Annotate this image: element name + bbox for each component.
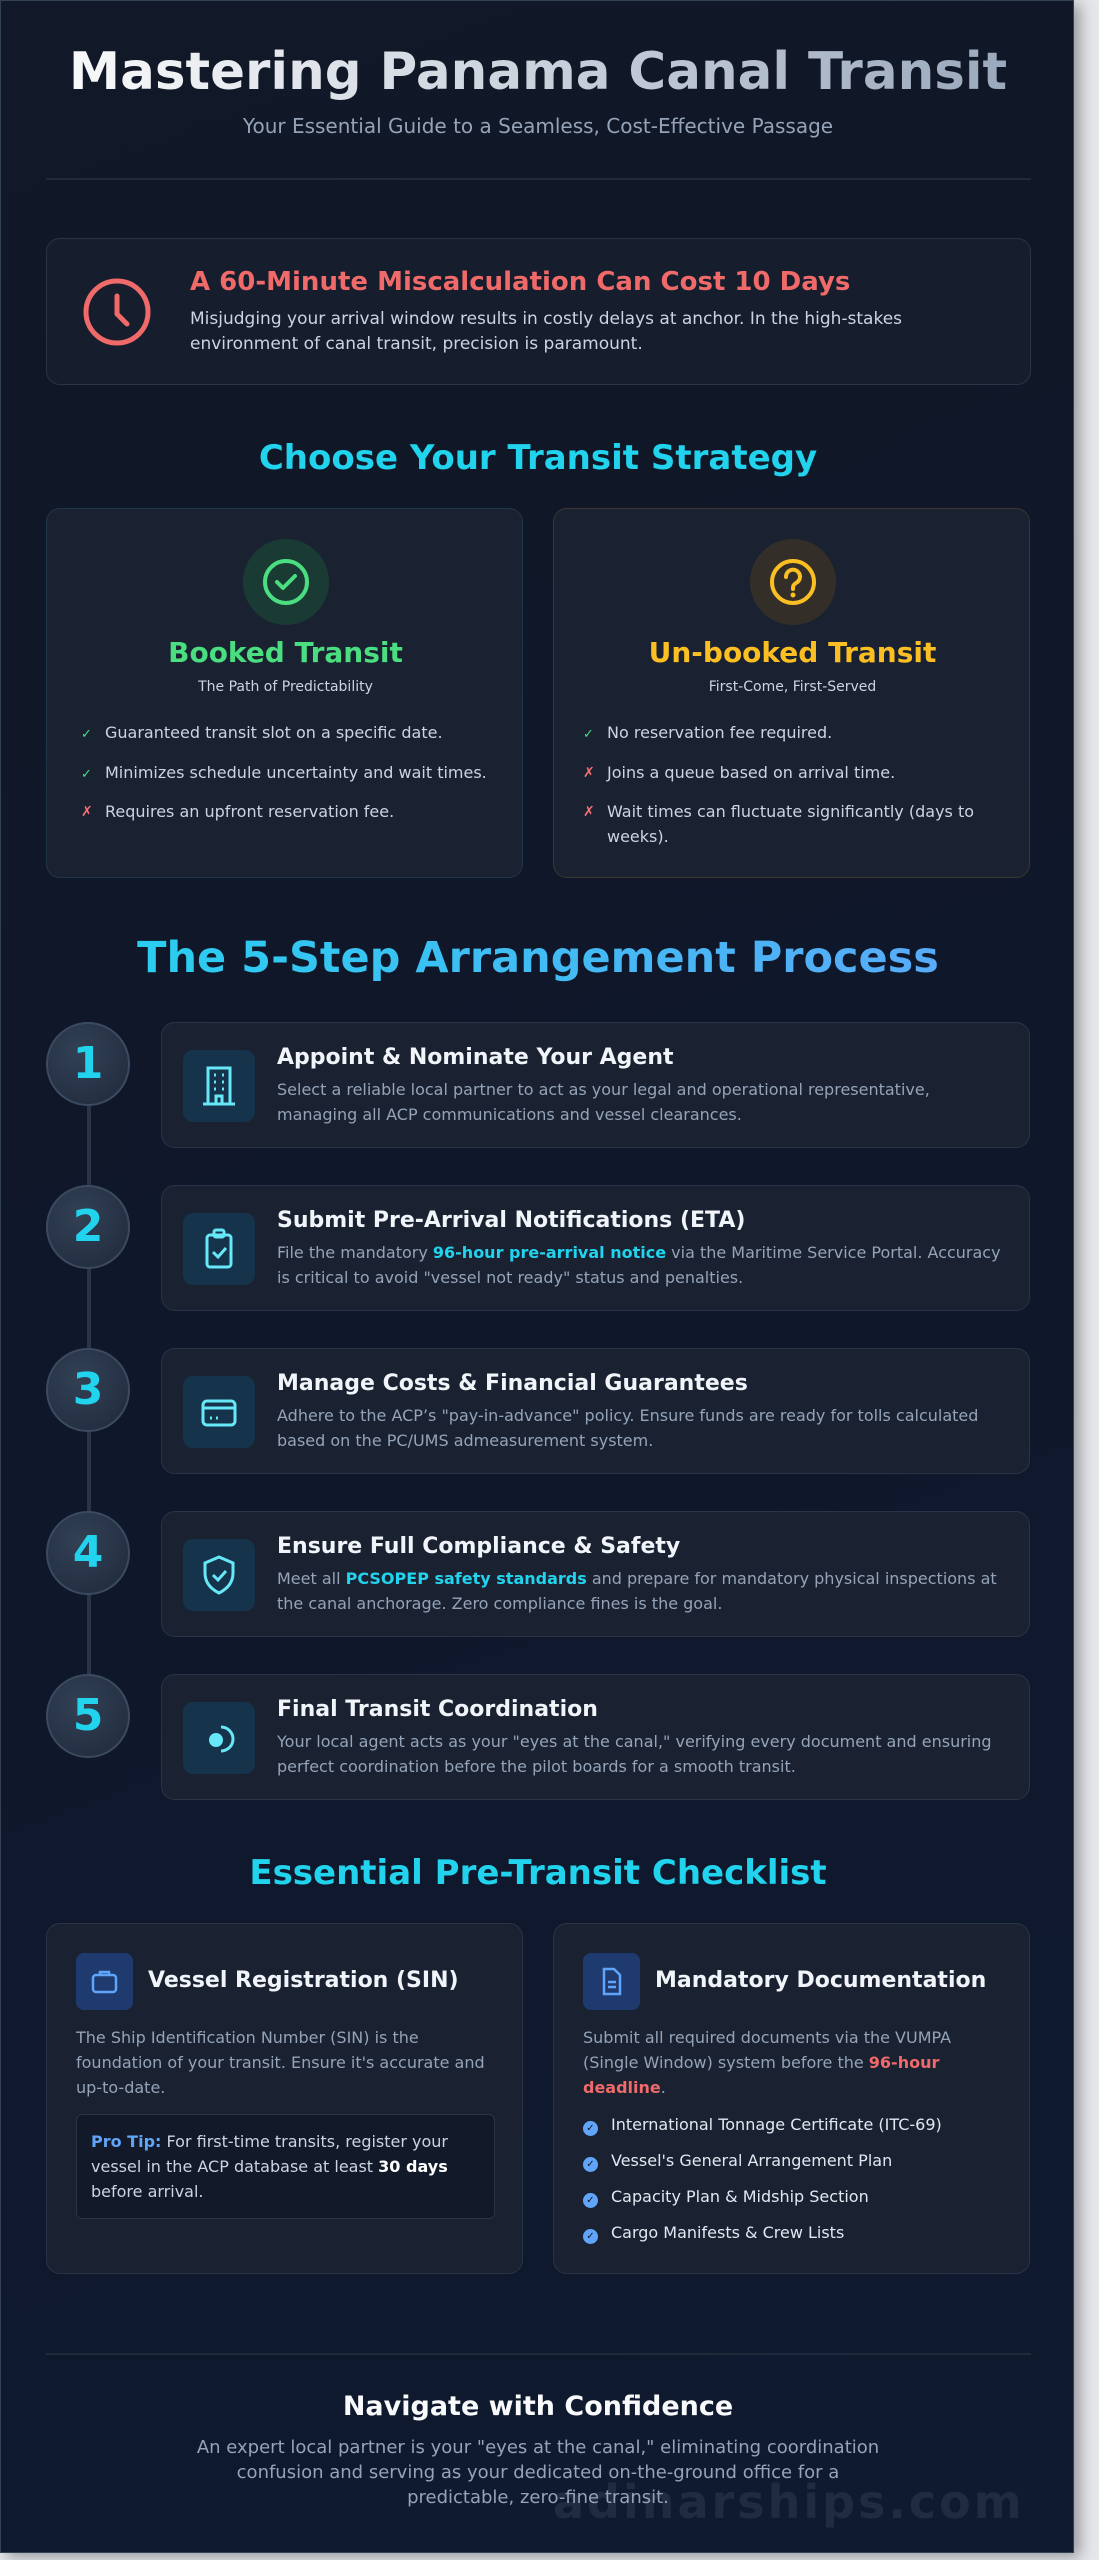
booked list: Guaranteed transit slot on a specific date. (105, 723, 443, 742)
un-booked list: Wait times can fluctuate significantly (days to weeks). (607, 802, 974, 846)
document list (583, 2115, 942, 2244)
step card 2 (161, 1185, 1030, 1311)
callout heading: A 60-Minute Miscalculation Can Cost 10 Days (190, 267, 850, 297)
step 5 (46, 1674, 1030, 1800)
step 1 (46, 1022, 1030, 1148)
icon: card (183, 1376, 255, 1448)
panel: booked transit: ✓ (81, 767, 92, 782)
panel: booked transit: ✗ (81, 804, 93, 820)
number 3: 3 (73, 1364, 103, 1415)
step card 3 (161, 1348, 1030, 1474)
footer text: An expert local partner is your "eyes at the canal," eliminating coordination confusion and serving as your dedicated on-the-ground office for a predictable, zero-fine transit. (197, 2437, 879, 2508)
documentation text: Submit all required documents via the VUMPA (Single Window) system before the 96-hour deadline. (583, 2028, 951, 2097)
panel: booked transit (46, 508, 523, 878)
document list: ✓ (586, 2159, 595, 2170)
un-booked list: Joins a queue based on arrival time. (607, 763, 895, 782)
icon: clipboard (183, 1213, 255, 1285)
step 4 (46, 1511, 1030, 1637)
panel: un-booked transit: ✓ (583, 727, 594, 742)
document list: Vessel's General Arrangement Plan (611, 2151, 892, 2170)
booked subtitle: The Path of Predictability (198, 679, 373, 695)
document list: Capacity Plan & Midship Section (611, 2187, 869, 2206)
registration text: The Ship Identification Number (SIN) is the foundation of your transit. Ensure it's accurate and up-to-date. (76, 2028, 485, 2097)
heading: strategy: Choose Your Transit Strategy (259, 438, 817, 478)
step card 4: Meet all PCSOPEP safety standards and prepare for mandatory physical inspections at the canal anchorage. Zero compliance fines is the goal. (277, 1569, 997, 1613)
step 2 (46, 1185, 1030, 1311)
document list: ✓ (586, 2195, 595, 2206)
panel: mandatory documentation (553, 1923, 1030, 2274)
icon: swirl (183, 1702, 255, 1774)
panel: un-booked transit: ✗ (583, 765, 595, 781)
number 5 (46, 1674, 130, 1758)
number 2 (46, 1185, 130, 1269)
heading: 5-step process: The 5-Step Arrangement Process (137, 933, 939, 983)
panel: un-booked transit (553, 508, 1030, 878)
panel: un-booked transit: ✗ (583, 804, 595, 820)
step card 2: Submit Pre-Arrival Notifications (ETA) (277, 1208, 745, 1233)
document list: ✓ (586, 2123, 595, 2134)
un-booked title: Un-booked Transit (649, 636, 936, 669)
document list: Cargo Manifests & Crew Lists (611, 2223, 844, 2242)
icon: clock (84, 278, 150, 346)
icon: building (183, 1050, 255, 1122)
callout text: Misjudging your arrival window results in costly delays at anchor. In the high-stakes environment of canal transit, precision is paramount. (190, 309, 902, 354)
booked title: Booked Transit (168, 636, 403, 669)
step card 3: Manage Costs & Financial Guarantees (277, 1371, 748, 1396)
pro tip box: Pro Tip: For first-time transits, register your vessel in the ACP database at least 30 days before arrival. (91, 2132, 448, 2201)
footer heading: Navigate with Confidence (343, 2391, 733, 2422)
icon: document (583, 1953, 640, 2010)
pro tip box (76, 2114, 495, 2219)
title: Mastering Panama Canal Transit (69, 42, 1007, 102)
icon: shield (183, 1539, 255, 1611)
step card 1: Appoint & Nominate Your Agent (277, 1045, 674, 1070)
number 4: 4 (73, 1527, 103, 1578)
booked list: Minimizes schedule uncertainty and wait times. (105, 763, 487, 782)
registration title: Vessel Registration (SIN) (148, 1968, 459, 1993)
panel: vessel registration (46, 1923, 523, 2274)
icon: check circle (243, 539, 329, 625)
heading: 5-step process (1, 930, 1075, 986)
panel: booked transit: ✓ (81, 727, 92, 742)
step card 1: Select a reliable local partner to act as your legal and operational representative, managing all ACP communications and vessel clearances. (277, 1080, 930, 1124)
document list: International Tonnage Certificate (ITC-69) (611, 2115, 942, 2134)
booked list (81, 723, 487, 821)
number 1: 1 (73, 1038, 103, 1089)
step card 4 (161, 1511, 1030, 1637)
number 1 (46, 1022, 130, 1106)
number 3 (46, 1348, 130, 1432)
documentation title: Mandatory Documentation (655, 1968, 986, 1993)
icon: question circle (750, 539, 836, 625)
step card 4: Ensure Full Compliance & Safety (277, 1534, 680, 1559)
subtitle: Your Essential Guide to a Seamless, Cost-Effective Passage (243, 114, 833, 138)
number 2: 2 (73, 1201, 103, 1252)
step card 3: Adhere to the ACP’s "pay-in-advance" policy. Ensure funds are ready for tolls calculated based on the PC/UMS admeasurement system. (277, 1406, 978, 1450)
document list: ✓ (586, 2231, 595, 2242)
callout: 60-minute warning (46, 238, 1031, 385)
number 5: 5 (73, 1690, 103, 1741)
heading: checklist: Essential Pre-Transit Checklist (249, 1853, 827, 1893)
step card 2: File the mandatory 96-hour pre-arrival notice via the Maritime Service Portal. Accuracy is critical to avoid "vessel not ready" status and penalties. (277, 1243, 1001, 1287)
un-booked list (583, 723, 974, 846)
step card 1 (161, 1022, 1030, 1148)
watermark: adinarships.com (553, 2475, 1025, 2529)
booked list: Requires an upfront reservation fee. (105, 802, 394, 821)
un-booked list: No reservation fee required. (607, 723, 832, 742)
un-booked subtitle: First-Come, First-Served (709, 679, 876, 695)
step card 5 (161, 1674, 1030, 1800)
step card 5: Final Transit Coordination (277, 1697, 598, 1722)
number 4 (46, 1511, 130, 1595)
step 3 (46, 1348, 1030, 1474)
icon: briefcase (76, 1953, 133, 2010)
step card 5: Your local agent acts as your "eyes at the canal," verifying every document and ensuring perfect coordination before the pilot boards for a smooth transit. (277, 1732, 992, 1776)
